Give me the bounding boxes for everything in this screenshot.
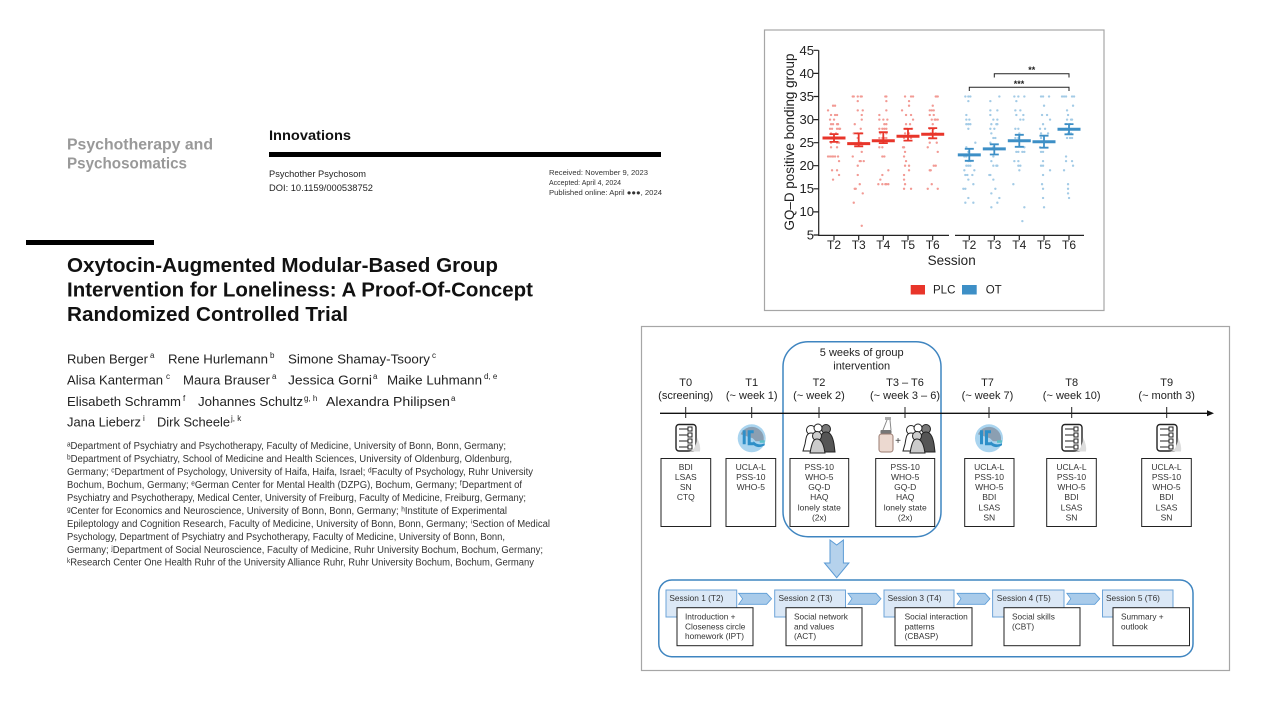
measure box T0: SN xyxy=(680,482,692,492)
significance brackets xyxy=(969,65,1069,91)
session 1: Introduction + xyxy=(685,611,736,621)
session 2: Session 2 (T3) xyxy=(778,593,833,603)
x axis labels: T2 xyxy=(962,238,977,252)
legend xyxy=(911,284,1002,296)
measure box T3-T6: (2x) xyxy=(898,512,913,522)
y axis labels: 30 xyxy=(800,112,814,127)
session 4 xyxy=(993,590,1080,646)
scatter dots: PLC xyxy=(828,96,938,226)
timepoint labels: (~ week 7) xyxy=(962,390,1013,402)
journal name: Psychosomatics xyxy=(67,156,187,172)
measure box T2: GQ-D xyxy=(808,482,830,492)
authors: Jana Lieberz xyxy=(67,414,141,430)
y axis labels: 20 xyxy=(800,158,814,173)
session 5 xyxy=(1102,590,1190,646)
authors: i xyxy=(143,414,145,423)
measure box T7: UCLA-L xyxy=(974,462,1005,472)
icon: brain scan T1 xyxy=(738,424,766,452)
publication dates: Received: November 9, 2023 xyxy=(549,168,648,177)
measure box T2: HAQ xyxy=(810,492,829,502)
affiliations: Germany; ʲDepartment of Social Neuroscience, Faculty of Medicine, Ruhr University Bochum, Bochum, Germany; xyxy=(67,545,543,556)
measure box T2 xyxy=(790,458,849,526)
timepoint labels: (~ week 2) xyxy=(793,390,845,402)
intervention highlight box: intervention xyxy=(833,360,890,372)
authors: c xyxy=(432,351,436,360)
measure box T2: PSS-10 xyxy=(805,462,834,472)
y axis labels: 25 xyxy=(800,135,814,150)
axes xyxy=(814,50,1084,240)
panel: study timeline xyxy=(642,326,1230,670)
x axis labels: T4 xyxy=(876,238,891,252)
authors xyxy=(67,351,498,430)
timeline arrow with ticks xyxy=(660,407,1214,418)
authors: g, h xyxy=(304,394,317,403)
authors: Maura Brauser xyxy=(183,372,271,388)
affiliations: Bochum, Bochum, Germany; ᵉGerman Center for Mental Health (DZPG), Bochum, Germany; ᶠDepartment of xyxy=(67,480,522,491)
x axis labels: T2 xyxy=(827,238,841,252)
timepoint labels: T8 xyxy=(1065,377,1078,389)
session 2: (ACT) xyxy=(794,631,816,641)
icon: questionnaire T8 xyxy=(1062,424,1086,452)
icon: questionnaire T9 xyxy=(1157,424,1181,452)
measure box T8: UCLA-L xyxy=(1056,462,1087,472)
authors: j, k xyxy=(230,414,242,423)
measure box T1: WHO-5 xyxy=(737,482,765,492)
timepoint labels: T7 xyxy=(981,377,994,389)
icon: group T2 xyxy=(803,424,835,453)
session 3: patterns xyxy=(905,621,935,631)
publication dates: Accepted: April 4, 2024 xyxy=(549,178,621,187)
session 5: Summary + xyxy=(1121,611,1164,621)
timepoint labels: (~ week 1) xyxy=(726,390,778,402)
arrow: down to sessions xyxy=(824,540,849,578)
authors: c xyxy=(166,372,170,381)
measure box T9: WHO-5 xyxy=(1152,482,1181,492)
authors: d, e xyxy=(484,372,498,381)
affiliations xyxy=(67,441,550,568)
affiliations: Psychiatry and Psychotherapy, Medical Center, University of Freiburg, Faculty of Medicine, Freiburg, Germany; xyxy=(67,493,526,504)
measure box T8: LSAS xyxy=(1061,502,1083,512)
chevron arrow xyxy=(957,593,990,604)
measure box T1: PSS-10 xyxy=(736,472,766,482)
measure box T7 xyxy=(965,458,1014,526)
affiliations: ᵏResearch Center One Health Ruhr of the University Alliance Ruhr, Ruhr University Bochum, Bochum, Germany xyxy=(67,558,534,568)
measure box T3-T6: lonely state xyxy=(884,502,927,512)
timepoint labels: (screening) xyxy=(658,390,713,402)
session 4: Session 4 (T5) xyxy=(997,593,1051,603)
authors: Johannes Schultz xyxy=(198,394,303,409)
authors: Elisabeth Schramm xyxy=(67,394,181,409)
scatter dots: OT xyxy=(963,96,1074,221)
measure box T1: UCLA-L xyxy=(736,462,766,472)
measure box T3-T6: WHO-5 xyxy=(891,472,920,482)
section heading: Innovations: Innovations xyxy=(269,127,351,143)
icon: nasal spray bottle plus group: + xyxy=(895,436,901,447)
chevron arrow xyxy=(848,593,881,604)
intervention highlight box: 5 weeks of group xyxy=(820,347,904,359)
session 3: Session 3 (T4) xyxy=(888,593,942,603)
session 3 xyxy=(884,590,972,646)
affiliations: Germany; ᶜDepartment of Psychology, University of Haifa, Haifa, Israel; ᵈFaculty of Psychology, Ruhr University xyxy=(67,467,533,478)
measure box T0 xyxy=(661,458,711,526)
measure box T8: BDI xyxy=(1064,492,1079,502)
session 2: Social network xyxy=(794,611,849,621)
session 3: (CBASP) xyxy=(905,631,938,641)
authors: a xyxy=(150,351,155,360)
session 1 xyxy=(666,590,753,646)
panel: GQ-D scatter chart xyxy=(764,30,1104,310)
measure box T7: WHO-5 xyxy=(975,482,1004,492)
significance brackets: ** xyxy=(1028,65,1036,75)
session 1: homework (IPT) xyxy=(685,631,744,641)
mean and error bars: OT xyxy=(958,124,1080,161)
measure box T7: BDI xyxy=(982,492,996,502)
authors: Dirk Scheele xyxy=(157,414,230,430)
journal name xyxy=(67,136,213,172)
timepoint labels: T0 xyxy=(679,377,692,389)
section heading: Innovations xyxy=(269,127,661,157)
authors: Maike Luhmann xyxy=(387,372,482,388)
measure box T2: (2x) xyxy=(812,512,827,522)
measure box T1 xyxy=(726,458,776,526)
citation and DOI: Psychother Psychosom xyxy=(269,169,366,180)
measure box T9: SN xyxy=(1161,512,1172,522)
measure box T7: SN xyxy=(983,512,995,522)
x axis labels: T5 xyxy=(901,238,915,252)
mean and error bars: PLC xyxy=(822,128,944,146)
measure box T9: LSAS xyxy=(1156,502,1178,512)
x axis labels: T4 xyxy=(1012,238,1027,252)
measure box T8: SN xyxy=(1066,512,1077,522)
x axis title: Session xyxy=(928,253,976,268)
y axis labels: 5 xyxy=(807,228,814,242)
authors: Simone Shamay-Tsoory xyxy=(288,352,431,366)
timepoint labels: T9 xyxy=(1160,377,1173,389)
authors: Alexandra Philipsen xyxy=(326,394,450,409)
y axis labels: 35 xyxy=(800,89,814,104)
session 2: and values xyxy=(794,621,834,631)
measure box T8: WHO-5 xyxy=(1057,482,1086,492)
measure box T9: BDI xyxy=(1159,492,1174,502)
timepoint labels: T3 – T6 xyxy=(886,377,924,389)
authors: Alisa Kanterman xyxy=(67,372,163,388)
authors: Jessica Gorni xyxy=(288,372,372,388)
y axis labels: 15 xyxy=(800,181,814,196)
measure box T9: PSS-10 xyxy=(1152,472,1181,482)
session 1: Closeness circle xyxy=(685,621,746,631)
measure box T3-T6: GQ-D xyxy=(894,482,916,492)
affiliations: ᵃDepartment of Psychiatry and Psychotherapy, Faculty of Medicine, University of Bonn, Bonn, Germany; xyxy=(67,441,506,452)
title with accent rule xyxy=(26,240,533,326)
timepoint labels xyxy=(658,377,1195,402)
measure box T9: UCLA-L xyxy=(1151,462,1182,472)
measure box T3-T6 xyxy=(876,458,935,526)
title with accent rule: Oxytocin-Augmented Modular-Based Group xyxy=(67,255,498,277)
authors: a xyxy=(373,372,378,381)
y axis labels: 40 xyxy=(800,66,814,81)
measure box T2: lonely state xyxy=(798,502,841,512)
authors: f xyxy=(183,394,186,403)
authors: a xyxy=(451,394,456,403)
session 2 xyxy=(775,590,862,646)
session 4: Social skills xyxy=(1012,611,1055,621)
timepoint labels: T1 xyxy=(745,377,758,389)
x axis labels: T5 xyxy=(1037,238,1051,252)
authors: a xyxy=(272,372,277,381)
title with accent rule: Intervention for Loneliness: A Proof-Of-Concept xyxy=(67,280,533,302)
session 5: Session 5 (T6) xyxy=(1106,593,1160,603)
measure box T8: PSS-10 xyxy=(1057,472,1086,482)
x axis labels: T3 xyxy=(987,238,1002,252)
timepoint labels: (~ week 10) xyxy=(1043,390,1101,402)
timepoint labels: T2 xyxy=(813,377,825,389)
icon: questionnaire T0 xyxy=(676,424,700,452)
chevron arrow xyxy=(739,593,772,604)
measure box T3-T6: HAQ xyxy=(896,492,915,502)
authors: Ruben Berger xyxy=(67,352,149,366)
citation and DOI xyxy=(269,169,373,194)
icon: brain scan T7 xyxy=(975,424,1003,452)
intervention highlight box xyxy=(783,342,941,537)
measure box T3-T6: PSS-10 xyxy=(891,462,920,472)
timepoint labels: (~ week 3 – 6) xyxy=(870,390,940,402)
session 4: (CBT) xyxy=(1012,621,1034,631)
session 1: Session 1 (T2) xyxy=(669,593,724,603)
legend: OT xyxy=(986,284,1002,296)
x axis labels: T6 xyxy=(926,238,940,252)
measure box T7: PSS-10 xyxy=(975,472,1004,482)
session 3: Social interaction xyxy=(905,611,968,621)
affiliations: ᵍCenter for Economics and Neuroscience, University of Bonn, Bonn, Germany; ʰInstitute of Experimental xyxy=(67,506,507,517)
panel: sessions xyxy=(659,580,1193,657)
measure box T2: WHO-5 xyxy=(805,472,834,482)
x axis labels: T6 xyxy=(1062,238,1076,252)
measure box T0: LSAS xyxy=(675,472,697,482)
y axis labels xyxy=(800,43,814,242)
y axis labels: 10 xyxy=(800,204,814,219)
authors: Rene Hurlemann xyxy=(168,352,268,366)
title with accent rule: Randomized Controlled Trial xyxy=(67,304,348,326)
affiliations: ᵇDepartment of Psychiatry, School of Medicine and Health Sciences, University of Oldenburg, Oldenburg, xyxy=(67,454,512,465)
measure box T0: BDI xyxy=(679,462,693,472)
measure box T8 xyxy=(1047,458,1096,526)
measure box T0: CTQ xyxy=(677,492,695,502)
publication dates xyxy=(549,168,662,197)
legend: PLC xyxy=(933,284,955,296)
authors: b xyxy=(270,351,275,360)
y axis title: GQ–D positive bonding group xyxy=(781,53,797,230)
affiliations: Psychology, Department of Psychiatry and Psychotherapy, Faculty of Medicine, University of Bonn, Bonn, xyxy=(67,532,505,543)
measure box T7: LSAS xyxy=(978,502,1000,512)
y axis labels: 45 xyxy=(800,43,814,58)
publication dates: Published online: April ●●●, 2024 xyxy=(549,188,662,197)
x axis labels xyxy=(827,238,1076,252)
significance brackets: *** xyxy=(1014,79,1025,89)
timepoint labels: (~ month 3) xyxy=(1138,390,1195,402)
affiliations: Epileptology and Cognition Research, Faculty of Medicine, University of Bonn, Bonn, Germany; ⁱSection of Medical xyxy=(67,519,550,530)
measure box T9 xyxy=(1142,458,1191,526)
journal name: Psychotherapy and xyxy=(67,136,213,154)
chevron arrow xyxy=(1067,593,1100,604)
x axis labels: T3 xyxy=(852,238,866,252)
session 5: outlook xyxy=(1121,621,1149,631)
citation and DOI: DOI: 10.1159/000538752 xyxy=(269,183,373,194)
icon: nasal spray bottle plus group xyxy=(879,417,935,453)
